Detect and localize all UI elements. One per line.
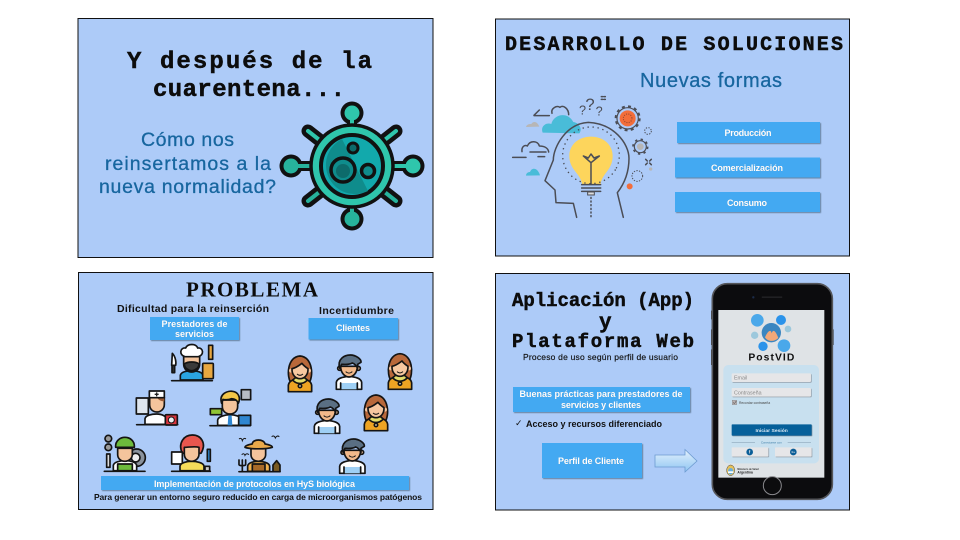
button: Clientes bbox=[308, 318, 398, 340]
icon: client man 1 bbox=[336, 355, 362, 389]
title: Desarrollo de soluciones: DESARROLLO DE SOLUCIONES bbox=[505, 34, 843, 57]
title: Y después de la cuarentena: cuarentena... bbox=[153, 77, 345, 104]
bar: Implementación de protocolos bbox=[101, 476, 409, 490]
login card: Recordar contraseña bbox=[739, 401, 770, 405]
arrow bbox=[655, 450, 697, 472]
button: Consumo: Consumo bbox=[727, 198, 768, 208]
login card: Iniciar Sesión bbox=[755, 428, 788, 434]
title: Problema: PROBLEMA bbox=[186, 278, 319, 302]
text: Acceso y recursos diferenciado: Acceso y recursos diferenciado bbox=[526, 419, 662, 429]
login card: G+ bbox=[792, 450, 796, 454]
icon: head with light bulb: ? bbox=[596, 104, 603, 118]
title: Y después de la cuarentena bbox=[127, 49, 372, 104]
icon: chef bbox=[172, 344, 213, 381]
question text bbox=[99, 129, 276, 198]
title: Aplicación (App) y Plataforma Web: y bbox=[599, 312, 612, 335]
icon: client man 2 bbox=[314, 399, 340, 433]
button: Prestadores de servicios bbox=[150, 317, 239, 340]
panel: desarrollo de soluciones bbox=[496, 19, 850, 256]
button: Buenas prácticas: servicios y clientes bbox=[561, 400, 641, 410]
icon: virus bbox=[280, 102, 424, 230]
icons: clients bbox=[288, 354, 412, 473]
icon: client woman 1 bbox=[288, 356, 312, 392]
button: Perfil de Cliente bbox=[542, 443, 642, 478]
ministry logo: Ministerio de Salud bbox=[737, 468, 759, 471]
icon: head with light bulb: ? bbox=[585, 95, 595, 114]
phone screen bbox=[718, 310, 824, 478]
panel: problema bbox=[78, 272, 433, 510]
button: Prestadores de servicios: Prestadores de bbox=[162, 319, 228, 329]
icon: nurse bbox=[136, 391, 178, 425]
button: Producción bbox=[677, 122, 820, 143]
question text: nueva normalidad? bbox=[99, 176, 276, 198]
icon: head with light bulb: ? bbox=[579, 104, 586, 118]
login card: Contraseña bbox=[734, 390, 762, 396]
icon: client woman 2 bbox=[388, 354, 412, 389]
heading: Nuevas formas: Nuevas formas bbox=[640, 70, 782, 92]
title: Aplicación (App) y Plataforma Web: Plataforma Web bbox=[512, 331, 694, 353]
button: Prestadores de servicios: servicios bbox=[175, 329, 214, 339]
title: Y después de la cuarentena: Y después de la bbox=[127, 49, 372, 76]
login card: f bbox=[749, 450, 751, 455]
title: Aplicación (App) y Plataforma Web bbox=[512, 290, 694, 353]
login card bbox=[723, 365, 819, 463]
button: Comercialización: Comercialización bbox=[711, 163, 783, 173]
login card: Conectarse con bbox=[761, 441, 782, 445]
icon: office worker bbox=[172, 435, 210, 471]
text: Para generar un entorno seguro: Para generar un entorno seguro reducido en carga de microorganismos patógenos bbox=[94, 492, 422, 502]
icon: client man 3 bbox=[340, 439, 365, 473]
ministry logo bbox=[727, 465, 759, 476]
button: Producción: Producción bbox=[724, 128, 772, 138]
icon: businessman bbox=[210, 390, 251, 426]
panel: aplicación y plataforma web bbox=[496, 274, 850, 510]
button: Consumo bbox=[675, 192, 820, 212]
button: Comercialización bbox=[675, 158, 820, 178]
bar: Implementación de protocolos: Implementación de protocolos en HyS biológica bbox=[154, 479, 356, 489]
icon: mechanic bbox=[104, 435, 145, 471]
login card: Email bbox=[734, 376, 747, 382]
ministry logo: Argentina bbox=[737, 471, 753, 475]
button: Clientes: Clientes bbox=[336, 323, 370, 333]
phone mockup bbox=[711, 284, 834, 499]
icon: head with light bulb bbox=[513, 95, 652, 218]
text: Proceso de uso según perfil de usuario: Proceso de uso según perfil de usuario bbox=[523, 352, 678, 362]
icon: client woman 3 bbox=[364, 395, 388, 431]
icon: farmer bbox=[239, 436, 280, 472]
text: Acceso y recursos diferenciado: ✓ bbox=[515, 419, 523, 429]
button: Buenas prácticas: Buenas prácticas para prestadores de bbox=[520, 389, 682, 399]
question text: reinsertamos a la bbox=[105, 153, 271, 175]
button: Perfil de Cliente: Perfil de Cliente bbox=[558, 456, 624, 466]
app logo: PostVID bbox=[748, 314, 795, 363]
heading: Incertidumbre: Incertidumbre bbox=[319, 305, 394, 317]
app logo: PostVID: PostVID bbox=[748, 352, 795, 363]
title: Aplicación (App) y Plataforma Web: Aplicación (App) bbox=[512, 290, 694, 312]
heading: Dificultad para la reinserción: Dificultad para la reinserción bbox=[117, 303, 269, 315]
panel: después de la cuarentena bbox=[78, 18, 433, 258]
button: Buenas prácticas bbox=[513, 387, 690, 412]
question text: Cómo nos bbox=[141, 129, 234, 151]
icons: service providers bbox=[104, 344, 280, 472]
